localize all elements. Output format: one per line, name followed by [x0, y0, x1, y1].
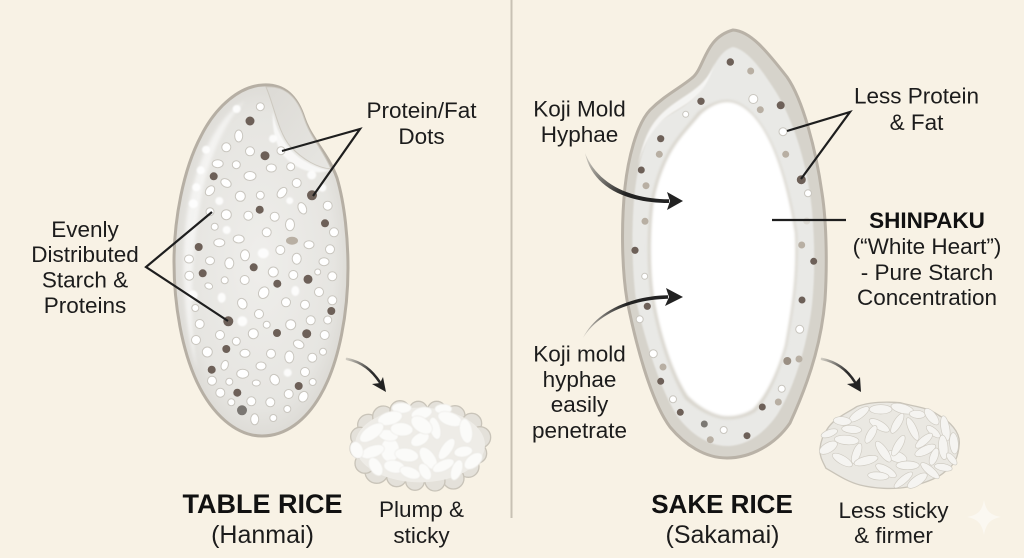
soft white granules: [188, 105, 326, 377]
label: shinpaku: Concentration: [857, 285, 997, 310]
pile grains: [348, 403, 486, 482]
label: evenly distributed: Evenly: [51, 217, 120, 242]
label: shinpaku: SHINPAKU: [869, 208, 985, 233]
label: evenly distributed: Distributed: [31, 242, 139, 267]
label: koji mold hyphae: Koji Mold: [533, 96, 626, 122]
inner layer: [632, 47, 814, 446]
shinpaku white heart: [651, 102, 795, 416]
folded tip: [266, 87, 331, 169]
caption: less sticky and firmer: & firmer: [854, 523, 933, 548]
label: koji mold penetrate: hyphae: [543, 367, 616, 392]
fold highlight: [273, 112, 331, 172]
label: evenly distributed: Starch &: [42, 268, 128, 292]
outer grain: [623, 30, 826, 458]
table rice grain: [174, 85, 348, 436]
label: koji mold hyphae: Hyphae: [541, 122, 618, 147]
protein and fat dots: [195, 116, 335, 415]
shinpaku halo: [648, 100, 797, 419]
starch granules: [184, 103, 338, 425]
pile fill: [355, 408, 485, 482]
grain body: [174, 85, 348, 436]
label: evenly distributed: Proteins: [44, 293, 126, 318]
caption: less sticky and firmer: Less sticky: [838, 498, 949, 523]
protein dots in outer layer: [631, 58, 817, 443]
arrow: sake rice to cooked: [822, 359, 861, 392]
heading: table rice: (Hanmai): [211, 521, 314, 549]
arrow: koji mold hyphae: [585, 153, 683, 210]
arrow: table rice to cooked: [347, 359, 386, 392]
sake rice grain: [623, 30, 826, 458]
label: shinpaku: - Pure Starch: [861, 260, 993, 285]
caption: plump and sticky: Plump &: [379, 497, 464, 522]
leader lines: protein/fat dots: [282, 129, 360, 196]
leader lines: evenly distributed: [146, 212, 228, 321]
pile lobes: [350, 401, 491, 491]
label: koji mold penetrate: easily: [551, 392, 609, 417]
grain highlight: [184, 101, 245, 370]
heading: table rice: TABLE RICE: [182, 489, 342, 519]
leader lines: less protein and fat: [787, 112, 850, 179]
leader line: shinpaku: [772, 219, 846, 221]
label: protein/fat dots: Dots: [398, 124, 445, 149]
left rim highlight: [638, 62, 715, 165]
label: shinpaku: (“White Heart”): [853, 234, 1001, 259]
arrow: koji mold penetrate: [583, 288, 683, 338]
label: less protein and fat: Less Protein: [854, 84, 979, 108]
pile base: [820, 402, 959, 488]
heading: sake rice: SAKE RICE: [651, 489, 793, 519]
icon: sparkle: [967, 500, 1001, 535]
heading: sake rice: (Sakamai): [666, 521, 779, 549]
label: koji mold penetrate: penetrate: [532, 418, 627, 443]
rice pile: table rice: [348, 401, 491, 491]
caption: plump and sticky: sticky: [393, 523, 450, 548]
pile grains: [817, 401, 959, 491]
label: less protein and fat: & Fat: [890, 110, 944, 135]
center divider: [510, 0, 512, 518]
label: koji mold penetrate: Koji mold: [533, 342, 626, 366]
label: protein/fat dots: Protein/Fat: [366, 98, 477, 123]
rice pile: sake rice: [817, 401, 959, 491]
